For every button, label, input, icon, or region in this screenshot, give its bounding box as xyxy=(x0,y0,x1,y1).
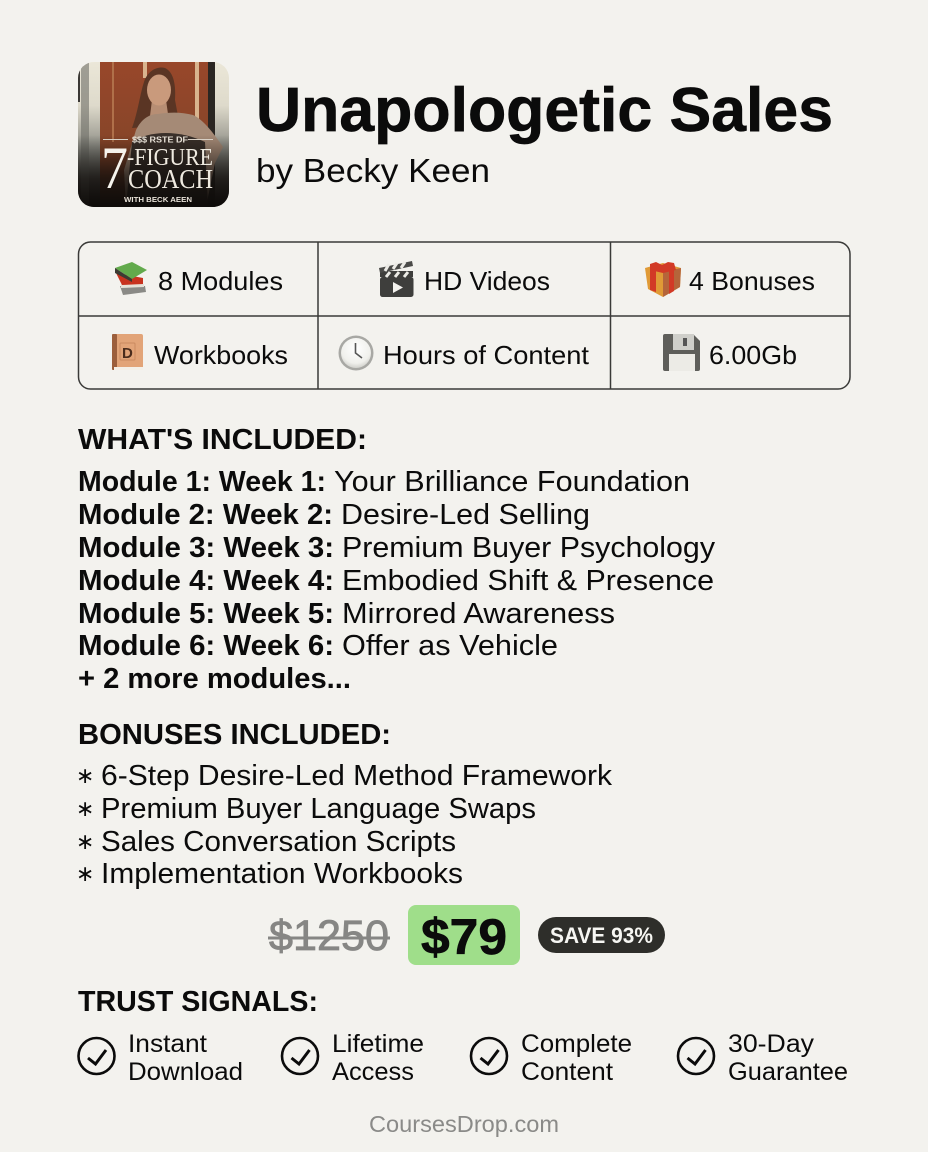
sale price: $79 xyxy=(421,909,507,965)
title: Unapologetic Sales xyxy=(256,76,833,145)
bonus list: Implementation Workbooks xyxy=(101,858,463,890)
feature table xyxy=(78,242,850,389)
module list: Module 2: Week 2: xyxy=(78,499,333,531)
bonus list xyxy=(76,760,613,890)
bonus list: ∗ xyxy=(76,830,94,855)
bonus list: ∗ xyxy=(76,764,94,789)
trust signal: guarantee: 30-Day xyxy=(728,1030,815,1058)
cell: 4 Bonuses: 4 Bonuses xyxy=(689,266,815,296)
trust signal: guarantee: Guarantee xyxy=(728,1058,848,1086)
icon: clock xyxy=(338,336,374,370)
bonus list: Premium Buyer Language Swaps xyxy=(101,793,536,825)
icon letter: D xyxy=(122,345,133,362)
icon: clapperboard xyxy=(379,261,414,297)
module list: Desire-Led Selling xyxy=(341,499,590,531)
trust signal: lifetime access xyxy=(282,1030,424,1086)
course cover thumbnail xyxy=(78,62,229,207)
savings badge xyxy=(538,917,665,953)
heading: what's included: WHAT'S INCLUDED: xyxy=(78,424,367,456)
trust signal: complete content xyxy=(471,1030,632,1086)
cell: HD Videos: HD Videos xyxy=(424,266,550,296)
bonus list: ∗ xyxy=(76,797,94,822)
icon: gift xyxy=(645,262,681,297)
trust signal: instant download: Instant xyxy=(128,1030,207,1058)
bonus list: 6-Step Desire-Led Method Framework xyxy=(101,760,613,792)
cover small heading: $$$ RSTE DF xyxy=(132,136,188,144)
cover byline: WITH BECK AEEN xyxy=(124,195,192,204)
module list: Module 4: Week 4: xyxy=(78,565,334,597)
cell: Hours of Content: Hours of Content xyxy=(383,340,590,370)
cover COACH: COACH xyxy=(128,164,213,194)
trust signal: guarantee xyxy=(678,1030,848,1086)
module list: Module 5: Week 5: xyxy=(78,598,334,630)
cell: Workbooks: Workbooks xyxy=(154,340,288,370)
price row xyxy=(268,905,665,965)
trust signal: instant download xyxy=(78,1030,243,1086)
module list: Premium Buyer Psychology xyxy=(342,532,716,564)
bonus list: Sales Conversation Scripts xyxy=(101,826,456,858)
cover FIGURE: -FIGURE xyxy=(127,145,213,171)
sale price xyxy=(408,905,520,965)
heading: bonuses included: BONUSES INCLUDED: xyxy=(78,719,391,751)
footer: CoursesDrop.com xyxy=(369,1111,559,1137)
cell: 8 Modules: 8 Modules xyxy=(158,266,283,296)
heading: trust signals: TRUST SIGNALS: xyxy=(78,986,318,1018)
module list: Module 1: Week 1: xyxy=(78,466,326,498)
module list: Offer as Vehicle xyxy=(342,630,558,662)
author: by Becky Keen xyxy=(256,152,490,189)
module list: Mirrored Awareness xyxy=(342,598,615,630)
trust signal: lifetime access: Access xyxy=(332,1058,414,1086)
trust signal: complete content: Complete xyxy=(521,1030,632,1058)
trust signal: complete content: Content xyxy=(521,1058,613,1086)
bonus list: ∗ xyxy=(76,862,94,887)
module list: Module 3: Week 3: xyxy=(78,532,334,564)
module list: Module 6: Week 6: xyxy=(78,630,334,662)
module list: Your Brilliance Foundation xyxy=(334,466,690,498)
module list: + 2 more modules... xyxy=(78,663,351,695)
module list xyxy=(78,466,716,695)
savings badge: SAVE 93% xyxy=(550,923,653,948)
icon: floppy disk xyxy=(663,334,700,371)
icon: workbook xyxy=(112,334,143,370)
cover numeral 7: 7 xyxy=(101,135,128,201)
trust signal: lifetime access: Lifetime xyxy=(332,1030,424,1058)
module list: Embodied Shift & Presence xyxy=(342,565,714,597)
original price: $1250 xyxy=(269,912,389,960)
cell: 6.00Gb: 6.00Gb xyxy=(709,340,797,370)
trust signal: instant download: Download xyxy=(128,1058,243,1086)
icon: books xyxy=(115,262,147,295)
